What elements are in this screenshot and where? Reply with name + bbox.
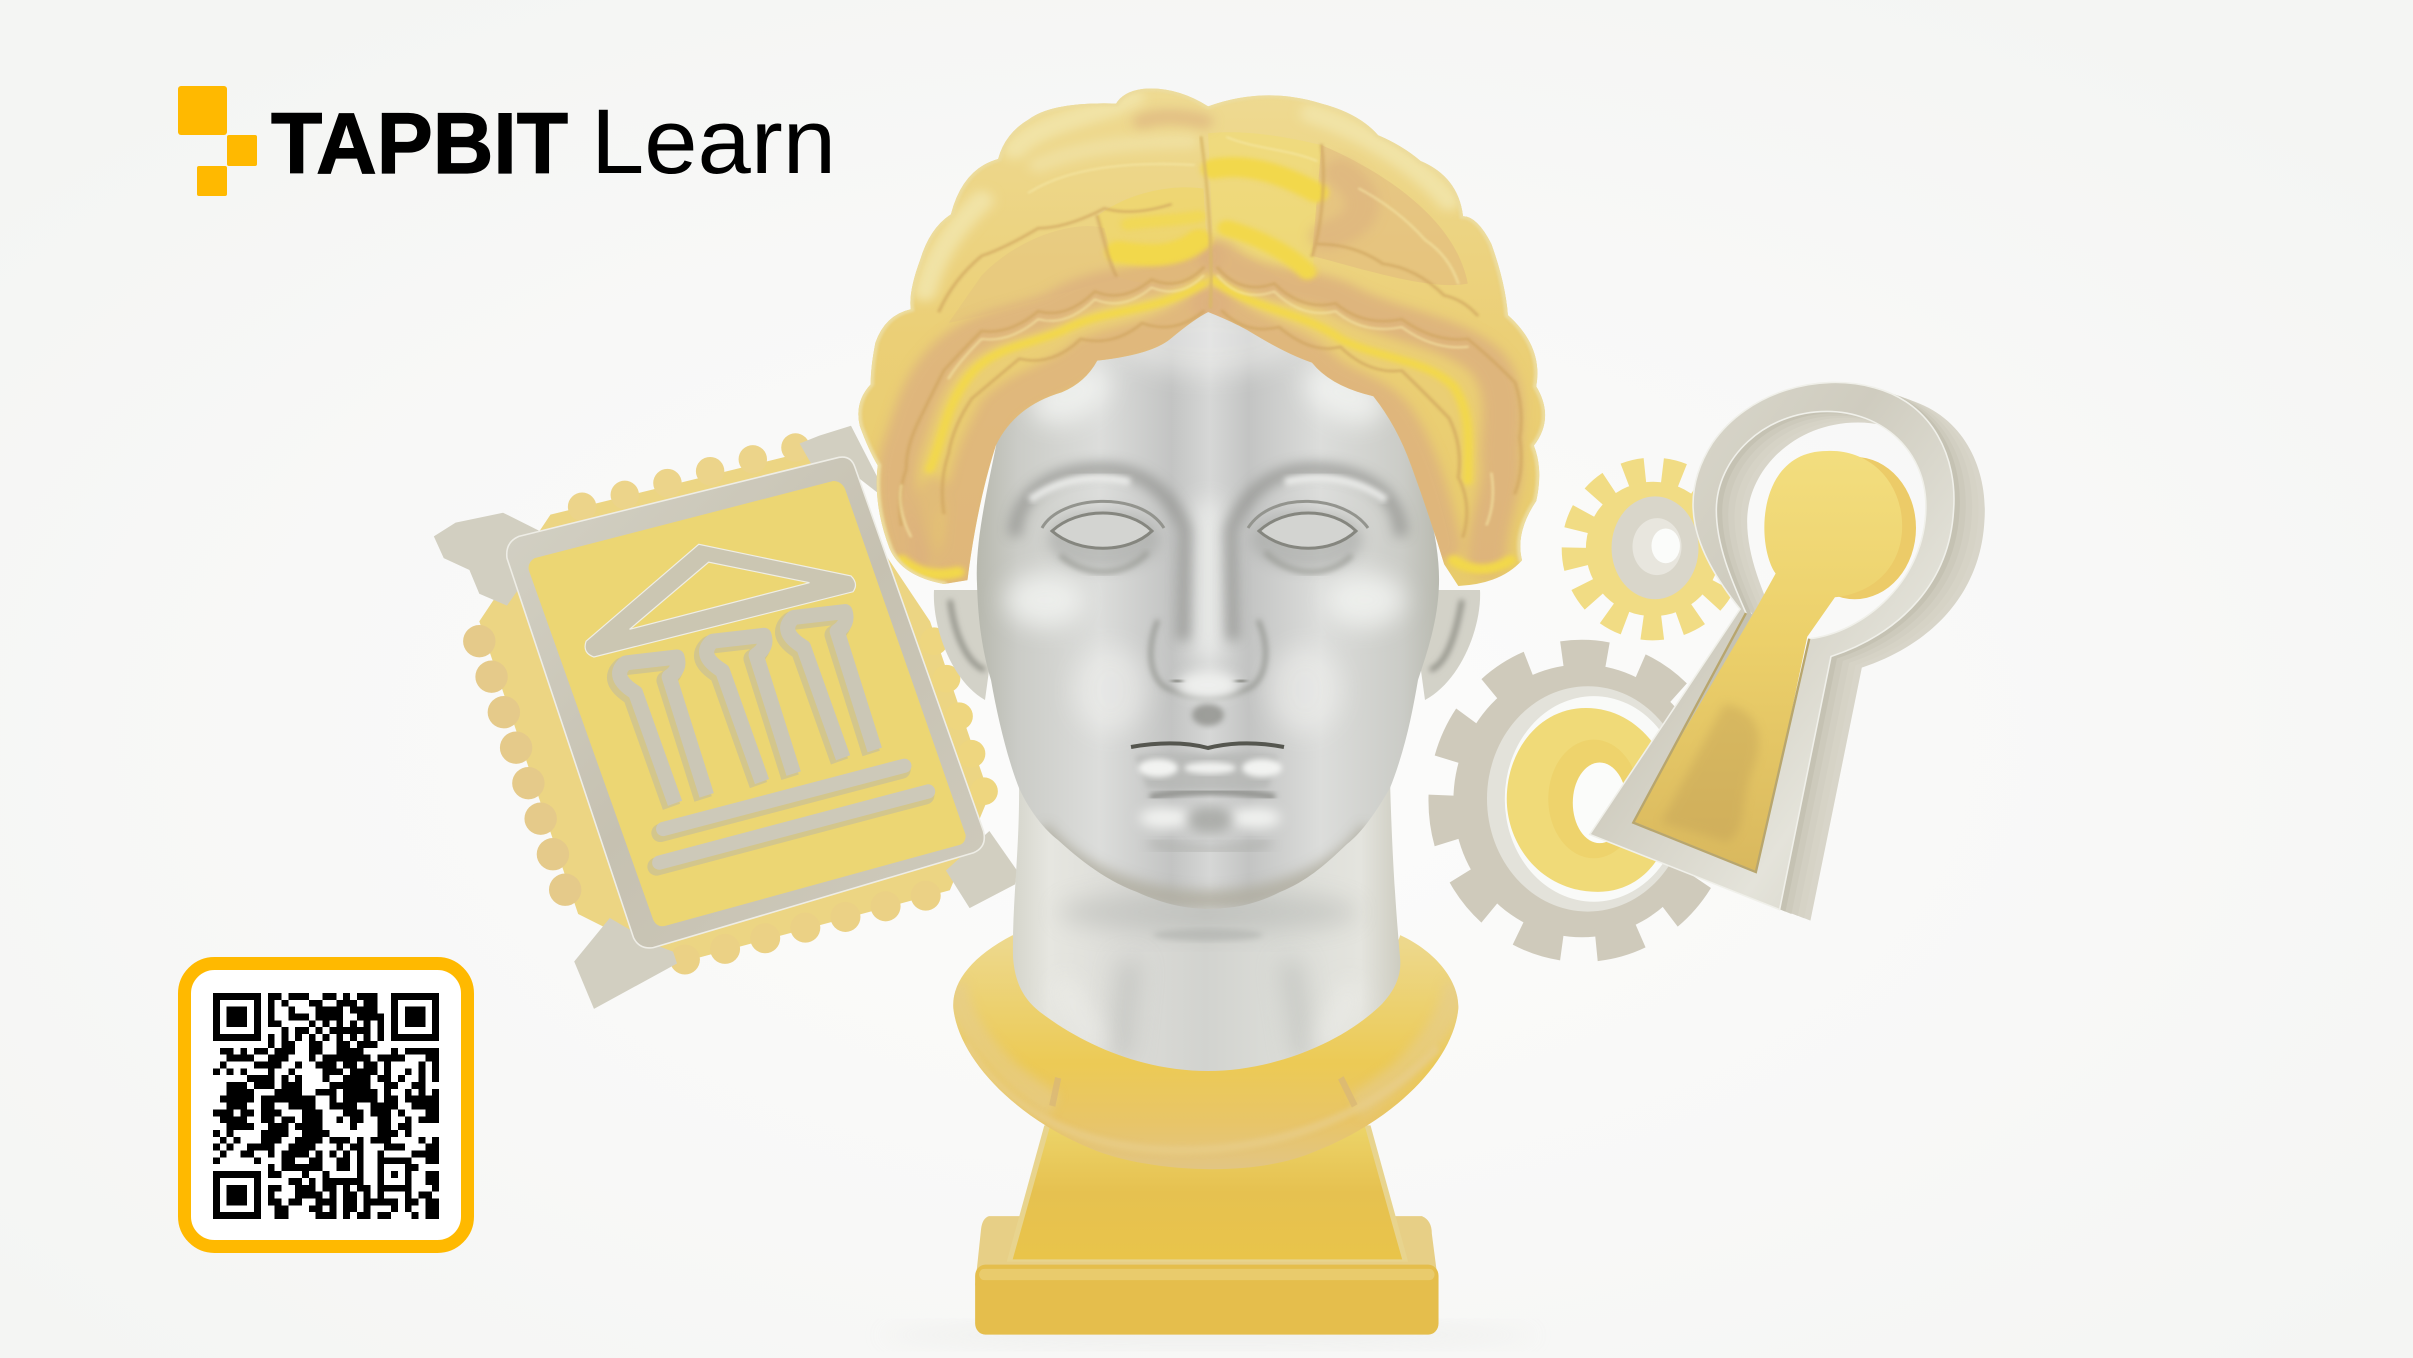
bust collar (953, 935, 1458, 1169)
hair pale top (925, 98, 1449, 291)
stamp frame (507, 457, 984, 948)
stamp inner panel (529, 481, 966, 926)
hair tan waves following the hairline (896, 117, 1503, 580)
keyhole metal frame (1590, 382, 1954, 910)
temple icon (585, 544, 928, 867)
face (970, 230, 1450, 920)
hair rim (858, 89, 1545, 584)
logo mark (178, 86, 257, 196)
right eye (1248, 501, 1368, 572)
left ear (934, 590, 1000, 700)
mouth (1131, 743, 1284, 850)
left eye (1042, 501, 1164, 572)
logo: TAPBIT Learn (178, 86, 836, 196)
QR code modules (213, 993, 439, 1219)
hair parting (1201, 137, 1211, 307)
hair fine wavy edges (900, 145, 1521, 537)
pedestal trapezoid (1007, 1125, 1408, 1262)
face highlights (1005, 304, 1405, 735)
stamp silver corners (434, 426, 1017, 1009)
icon: gears and keyhole (1445, 382, 1985, 944)
pedestal slab (975, 1265, 1439, 1335)
hair bright yellow zones (901, 167, 1510, 574)
right ear (1410, 590, 1480, 700)
logo suffix: Learn (591, 91, 836, 193)
pedestal step (975, 1216, 1439, 1285)
ground shadow (878, 1326, 1538, 1344)
hair translucent layers (1066, 132, 1468, 285)
icon: institution stamp (434, 426, 1017, 1009)
eye and brow shading (1015, 469, 1401, 640)
temple columns (616, 612, 875, 807)
hair (858, 89, 1545, 586)
logo wordmark: TAPBIT (271, 96, 568, 192)
bust pedestal (975, 1125, 1439, 1335)
temple base bars (656, 766, 928, 867)
bust head (934, 230, 1480, 1080)
small yellow gear (1574, 470, 1732, 628)
keyhole extrusion (1596, 384, 1985, 921)
jaw shadow (1040, 830, 1370, 900)
keyhole (1590, 382, 1985, 921)
stamp perforated translucent edge (479, 447, 989, 963)
QR code card (184, 964, 468, 1246)
temple pediment (585, 544, 856, 657)
keyhole yellow back (1793, 457, 1916, 599)
nose (1151, 620, 1266, 726)
yellow gear hub (1507, 708, 1673, 892)
hair light wavy edges (900, 137, 1493, 537)
keyhole yellow fill (1631, 451, 1902, 872)
neck (1012, 787, 1400, 1071)
large silver gear (1445, 658, 1718, 944)
